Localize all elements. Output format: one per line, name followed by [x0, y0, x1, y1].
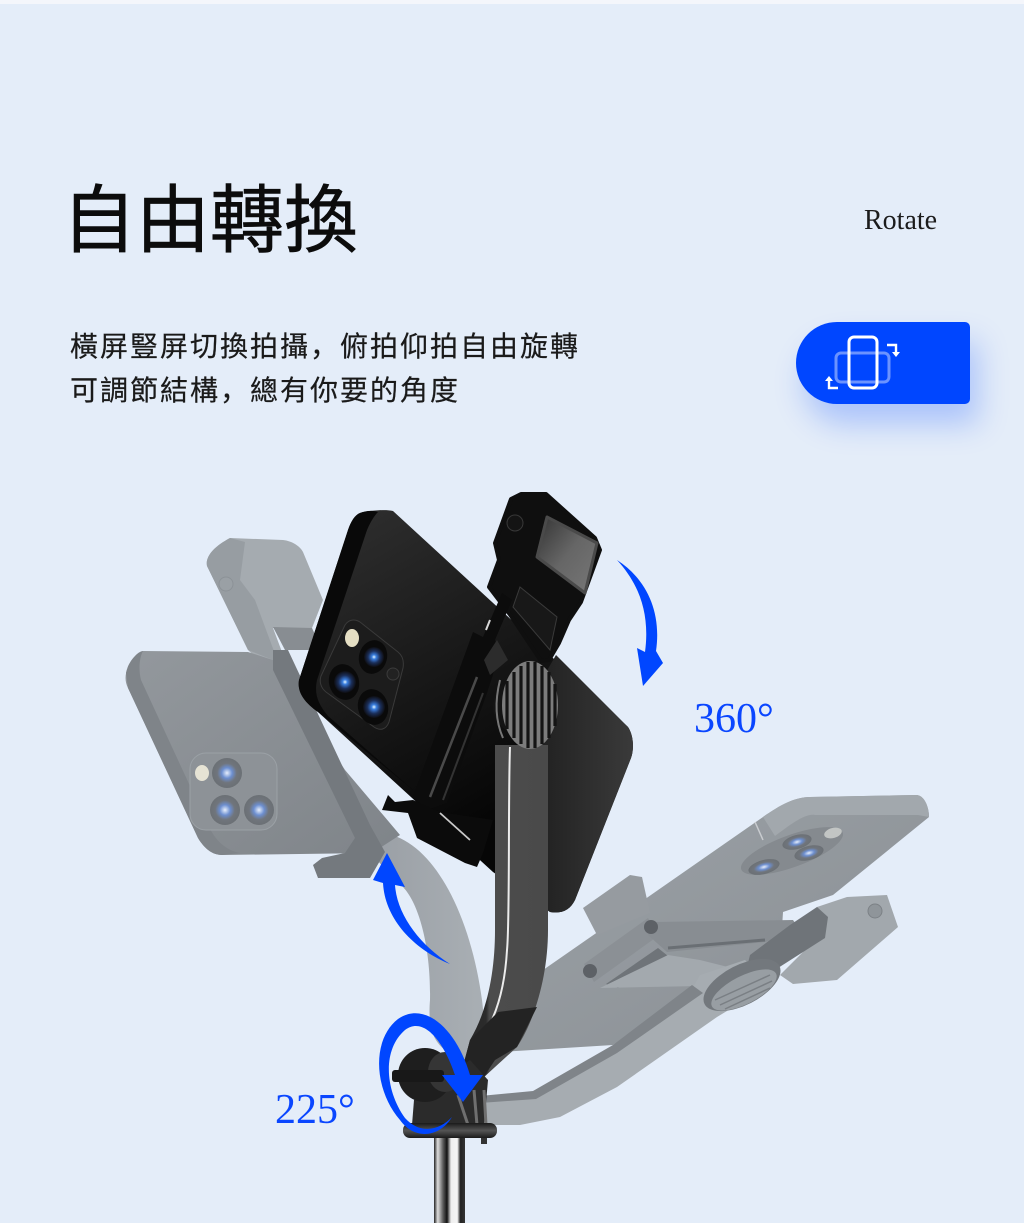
- description text: 橫屏豎屏切換拍攝，俯拍仰拍自由旋轉: [70, 331, 580, 362]
- ghost phone: right flat position: [500, 795, 929, 1052]
- main phone: [299, 510, 633, 912]
- main clamp: [382, 494, 600, 867]
- title: 自由轉換: [62, 179, 358, 262]
- arrow: 225 rotation: [379, 1013, 483, 1134]
- description text: [70, 331, 580, 406]
- arm highlight: [487, 747, 510, 1030]
- label: 360 degrees: 360°: [694, 696, 774, 742]
- rotate button with icon: [796, 322, 970, 404]
- ghost arm: right position: [470, 948, 789, 1125]
- icon: rotate phone: [825, 336, 900, 390]
- english label: Rotate: Rotate: [864, 205, 937, 236]
- description text: 可調節結構，總有你要的角度: [70, 375, 460, 406]
- arrow: 360 rotation: [617, 560, 663, 686]
- ghost arm: left position: [372, 835, 484, 1095]
- label: 225 degrees: 225°: [275, 1087, 355, 1133]
- main arm: [462, 745, 548, 1078]
- arm dark lower part: [462, 1007, 537, 1078]
- hub and mount: [392, 1048, 497, 1146]
- ghost phone: left tilted position: [126, 538, 400, 878]
- ribbed knob: [493, 661, 558, 749]
- camera module: [320, 620, 403, 729]
- telescopic pole: [434, 1138, 465, 1223]
- arrow: left tilt: [373, 853, 450, 964]
